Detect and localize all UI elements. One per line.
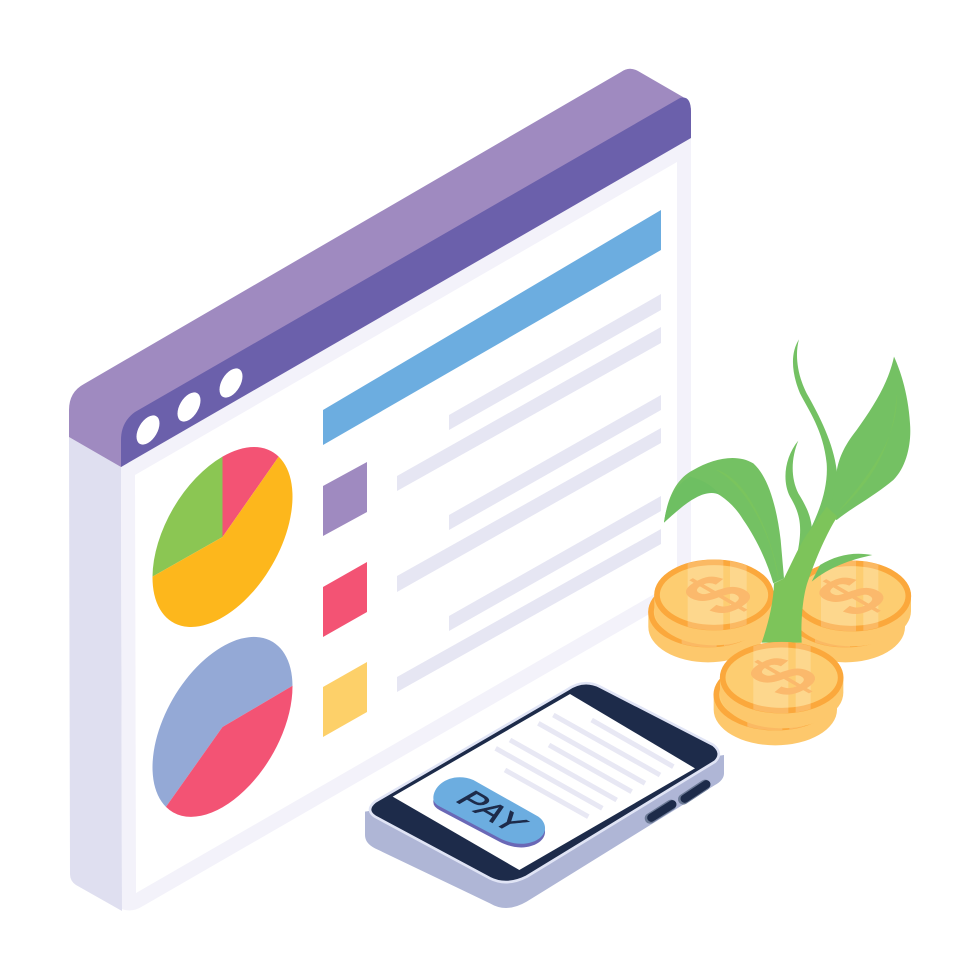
pay label: PAY bbox=[448, 786, 537, 837]
coin stack bottom bbox=[714, 640, 843, 745]
blue header bar bbox=[323, 210, 661, 445]
legend swatch purple bbox=[323, 462, 367, 536]
left leaf vein bbox=[717, 470, 778, 578]
title bar front face bbox=[121, 98, 691, 467]
coin stack right bbox=[786, 557, 911, 662]
small sprout bbox=[785, 441, 812, 557]
plant bbox=[664, 339, 910, 643]
left leaf bbox=[664, 458, 784, 583]
right leaf vein bbox=[837, 393, 897, 513]
main stem bbox=[762, 507, 837, 643]
left leaf shade bbox=[664, 477, 720, 523]
title bar top face bbox=[69, 69, 691, 467]
dollar sign: $ bbox=[662, 563, 774, 627]
text placeholder lines bbox=[397, 294, 661, 692]
illustration bbox=[69, 68, 912, 911]
pay button bbox=[433, 777, 545, 847]
window left side face bbox=[69, 437, 122, 911]
phone text lines bbox=[496, 715, 673, 817]
phone body bbox=[370, 683, 719, 882]
side buttons bbox=[650, 784, 706, 818]
small right leaf bbox=[812, 554, 872, 582]
dollar sign: $ bbox=[796, 564, 907, 628]
smartphone bbox=[365, 683, 724, 908]
plant and coins bbox=[648, 339, 911, 745]
pie chart: two slices bbox=[153, 606, 293, 848]
right leaf bbox=[830, 357, 910, 520]
dollar sign: $ bbox=[727, 644, 839, 709]
phone screen bbox=[393, 694, 695, 870]
window front frame bbox=[121, 138, 691, 910]
coin stack left bbox=[648, 557, 774, 662]
legend swatch yellow bbox=[323, 662, 367, 737]
legend swatch red bbox=[323, 562, 367, 637]
phone side bbox=[365, 755, 724, 908]
browser window bbox=[69, 69, 691, 911]
tall sprout bbox=[793, 339, 838, 530]
window content area bbox=[135, 162, 677, 893]
pie chart: three slices bbox=[152, 416, 292, 658]
window control dots bbox=[136, 363, 242, 450]
